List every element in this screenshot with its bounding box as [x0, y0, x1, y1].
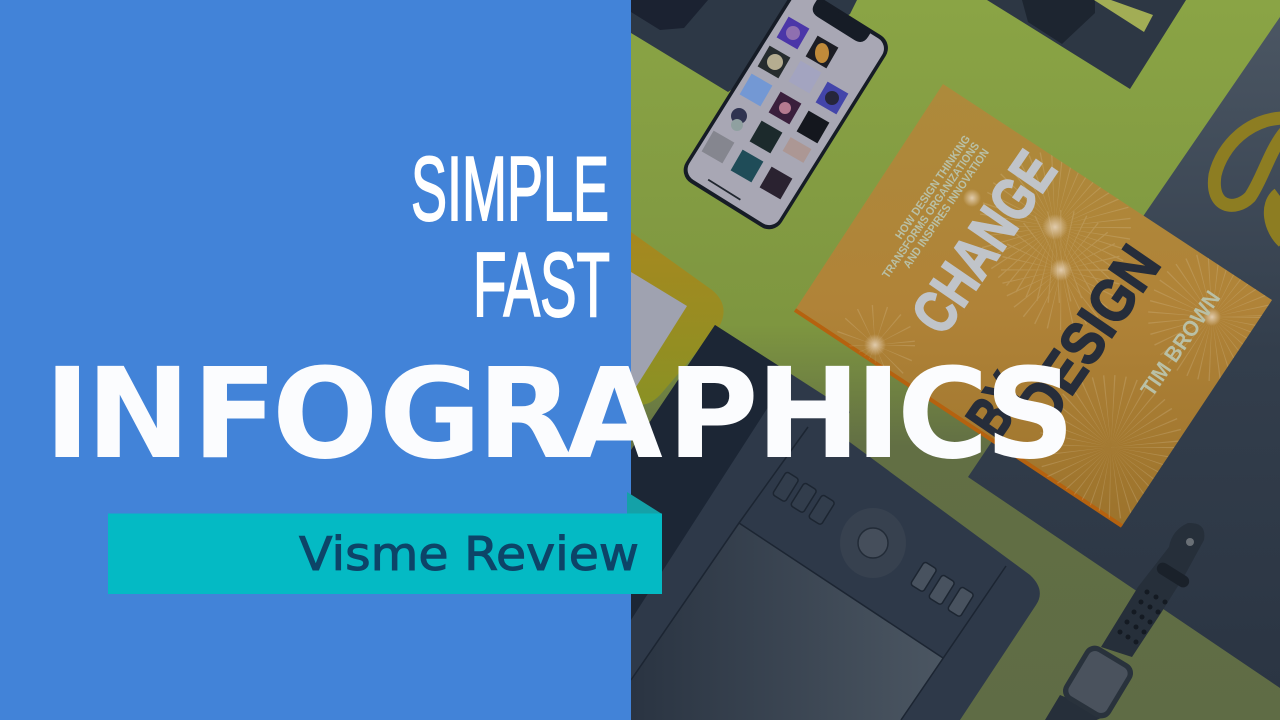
main title: INFOGRAPHICS: [44, 342, 1075, 487]
top notebook: [987, 0, 1186, 89]
watch face: [1059, 642, 1137, 720]
heading word: simple: SIMPLE: [411, 139, 609, 240]
ribbon label: Visme Review: [299, 527, 639, 581]
tablet dial: [840, 508, 906, 578]
top-left dark surface: [631, 0, 857, 92]
book cover burst pattern: [855, 189, 1244, 483]
photo panel: desk flat-lay: [631, 0, 1280, 720]
phone: [678, 0, 894, 235]
tablet drawing area: [631, 523, 943, 720]
orange silicone case: [631, 232, 724, 405]
graphics tablet: [631, 325, 1040, 720]
tablet left express keys: [772, 471, 835, 525]
heading word: fast: FAST: [473, 235, 610, 336]
scissors: [1214, 118, 1280, 240]
book author: TIM BROWN: [1136, 286, 1225, 401]
book title: change: CHANGE: [898, 139, 1069, 345]
dark tablet corner at top left: [631, 0, 708, 30]
green paper background: [631, 0, 1280, 720]
ribbon: Visme Review: [108, 492, 662, 594]
smart watch: [1042, 523, 1204, 720]
book glow spots: [864, 189, 1221, 356]
book: [795, 84, 1272, 526]
book title: design: DESIGN: [1004, 234, 1173, 436]
right dark paper: [968, 17, 1280, 688]
strap perforations: [1118, 590, 1168, 644]
tablet right express keys: [910, 561, 974, 617]
book subtitle: AND INSPIRES INNOVATION: [902, 147, 992, 271]
ribbon fold: [627, 492, 662, 514]
ribbon bar: [108, 514, 662, 594]
white pad inside the case: [631, 272, 687, 395]
tablet side edge lines: [631, 427, 1006, 720]
phone poster grid: [702, 17, 848, 199]
book subtitle: HOW DESIGN THINKING: [894, 133, 973, 242]
book subtitle: TRANSFORMS ORGANIZATIONS: [881, 140, 982, 281]
blue left panel: [0, 0, 631, 720]
book title: by: BY: [953, 362, 1043, 449]
